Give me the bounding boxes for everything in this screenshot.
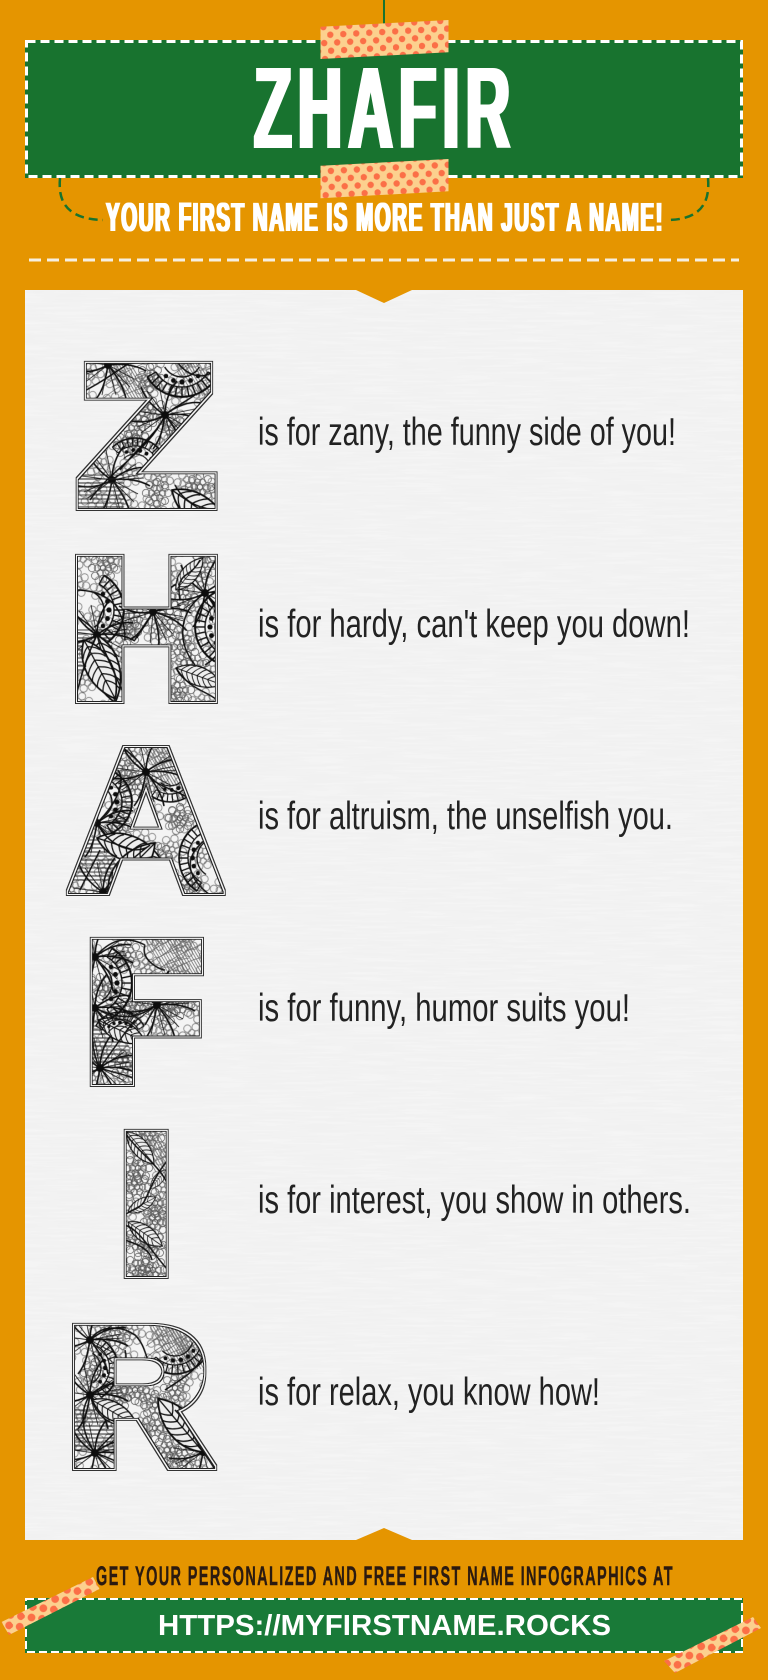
footer banner bbox=[25, 1598, 743, 1653]
bracket: right bbox=[669, 178, 708, 220]
letter: F: F bbox=[86, 904, 202, 1119]
letter: I: I bbox=[120, 1096, 172, 1311]
row: R bbox=[67, 1289, 600, 1504]
tape: footer left bbox=[2, 1577, 100, 1635]
bracket: left bbox=[60, 178, 103, 220]
line: R: is for relax, you know how! bbox=[258, 1371, 600, 1414]
letter: Z: Z bbox=[79, 328, 214, 543]
URL: HTTPS://MYFIRSTNAME.ROCKS bbox=[158, 1610, 611, 1642]
row: F bbox=[86, 904, 630, 1119]
row: Z bbox=[79, 328, 676, 543]
row: I bbox=[120, 1096, 691, 1311]
tape: top bbox=[320, 20, 448, 59]
tape: footer right bbox=[664, 1617, 761, 1673]
letter: R: R bbox=[67, 1289, 209, 1504]
name title: ZHAFIR bbox=[254, 43, 516, 173]
tape: bottom of banner bbox=[320, 159, 448, 198]
line: F: is for funny, humor suits you! bbox=[258, 987, 630, 1030]
row: A bbox=[68, 707, 673, 933]
letter: H: H bbox=[70, 521, 222, 736]
row: H bbox=[70, 521, 690, 736]
panel: letters bbox=[25, 290, 743, 1540]
title banner bbox=[25, 40, 743, 178]
letter: A: A bbox=[68, 707, 224, 933]
string at top bbox=[383, 0, 385, 26]
